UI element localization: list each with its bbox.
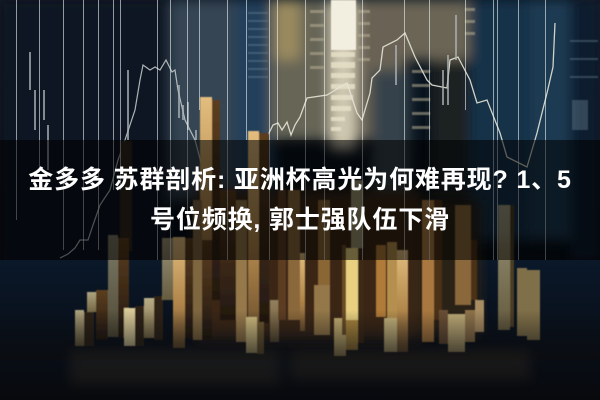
brown mass behind bars — [195, 190, 480, 340]
gold bars — [75, 97, 540, 356]
floor reflections — [70, 350, 530, 385]
title text: 金多多 苏群剖析: 亚洲杯高光为何难再现? 1、5 — [28, 166, 572, 194]
title band overlay — [0, 140, 600, 260]
line chart: left peak — [60, 60, 228, 258]
title text — [28, 166, 572, 234]
floor shading — [0, 310, 600, 360]
line chart: right peaks — [268, 23, 555, 167]
floor — [0, 260, 600, 400]
candlestick ticks — [29, 15, 457, 170]
title text: 号位频换, 郭士强队伍下滑 — [150, 206, 450, 234]
building highlights — [248, 0, 598, 131]
city buildings backdrop — [0, 0, 600, 270]
